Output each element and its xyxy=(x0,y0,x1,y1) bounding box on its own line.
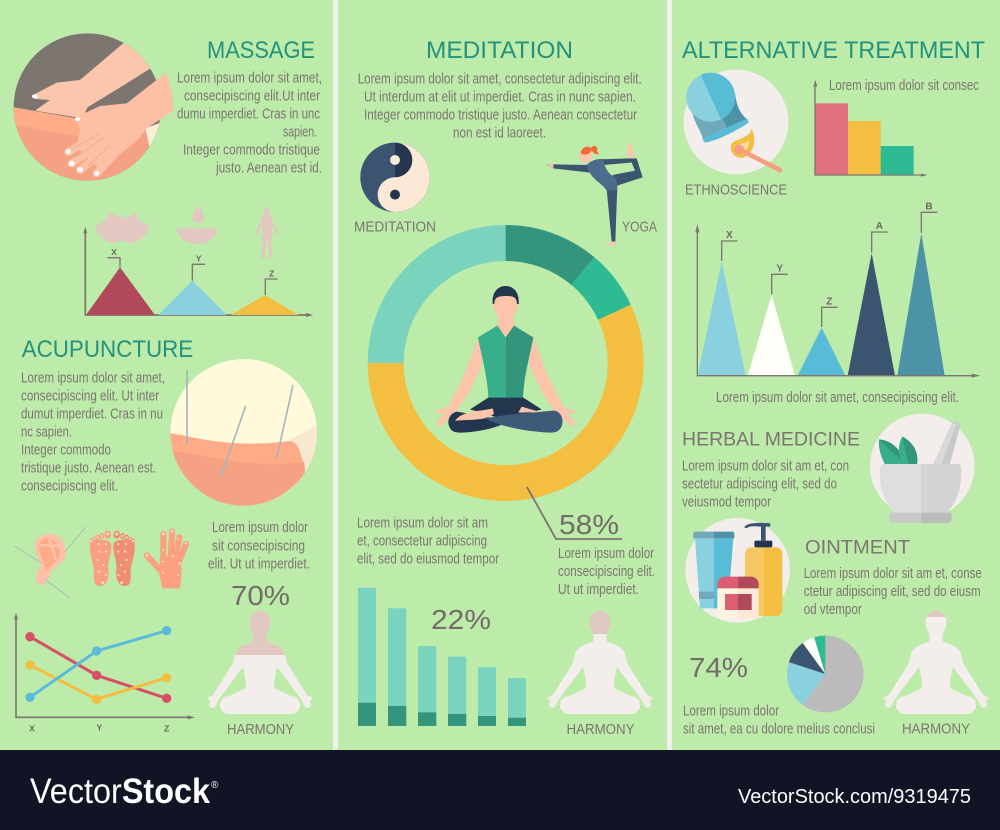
figure: meditating man xyxy=(433,286,578,433)
meditation text block: Integer commodo tristique justo. Aenean consectetur xyxy=(364,107,637,123)
url: vectorstock id: VectorStock.com/9319475 xyxy=(738,786,971,808)
label: meditation: MEDITATION xyxy=(354,219,436,236)
chart: tall triangles: Z xyxy=(826,296,832,307)
ointment text block: od vtempor xyxy=(804,602,862,618)
icon: left foot xyxy=(90,531,111,586)
label: harmony: HARMONY xyxy=(227,721,294,738)
stat: 74%: 74% xyxy=(689,652,748,683)
label: ethnoscience: ETHNOSCIENCE xyxy=(685,182,787,199)
herbal text block: Lorem ipsum dolor sit am et, con xyxy=(682,459,849,475)
icon: ointment products xyxy=(685,518,790,623)
chart: line chart: Z xyxy=(164,723,170,733)
chart: bars xyxy=(358,588,526,726)
massage text block xyxy=(177,71,322,177)
chart: line chart xyxy=(14,613,195,733)
herbal text block: sectetur adipiscing elit, sed do xyxy=(682,477,837,493)
acupuncture text block: consecipiscing elit. Ut inter xyxy=(21,389,159,405)
panel: meditation xyxy=(354,37,657,738)
stat: 22%: 22% xyxy=(431,604,491,635)
icons: ear, feet and hand xyxy=(14,527,187,598)
text: under donut left: elit, sed do eiusmod tempor xyxy=(357,552,499,568)
chart: tall triangles: A xyxy=(876,221,883,232)
massage illustration xyxy=(14,33,174,181)
icon: human body xyxy=(254,207,279,259)
chart: tall triangles: Y xyxy=(776,263,783,274)
acupuncture text block: tristique justo. Aenean est. xyxy=(21,461,156,477)
text: pie caption xyxy=(683,704,875,738)
meditation text block: Ut interdum at elit ut imperdiet. Cras in nunc sapien. xyxy=(364,89,636,105)
text: under donut left: Lorem ipsum dolor sit am xyxy=(357,516,488,532)
text: under donut left: et, consectetur adipiscing xyxy=(357,534,487,550)
text: lorem ipsum 70: Lorem ipsum dolor xyxy=(212,520,308,536)
figure: harmony 22 xyxy=(547,611,653,714)
massage text block: consecipiscing elit.Ut inter xyxy=(184,89,320,105)
chart: massage triangles xyxy=(83,205,313,317)
massage text block: sapien. xyxy=(283,125,317,141)
text: lorem ipsum 70: elit. Ut ut imperdiet. xyxy=(208,557,310,573)
acupuncture text block: consecipiscing elit. xyxy=(21,479,118,495)
title: acupuncture: ACUPUNCTURE xyxy=(22,336,193,363)
title: meditation: MEDITATION xyxy=(426,37,573,64)
text: under donut right: Lorem ipsum dolor xyxy=(558,546,654,562)
meditation text block: non est id laoreet. xyxy=(453,125,546,141)
chart: tall triangles xyxy=(695,201,980,378)
stat: 70%: 70% xyxy=(231,580,290,611)
label: yoga: YOGA xyxy=(622,219,657,236)
chart: massage triangles: X xyxy=(111,247,117,257)
panel: massage and acupuncture xyxy=(10,30,323,738)
logo registered mark: ® xyxy=(211,780,219,791)
chart: tall triangles: X xyxy=(726,230,733,241)
meditation text block: Lorem ipsum dolor sit amet, consectetur adipiscing elit. xyxy=(358,71,642,87)
chart: massage triangles: Y xyxy=(196,254,202,264)
acupuncture text block: Integer commodo xyxy=(21,443,111,459)
title: alternative treatment: ALTERNATIVE TREATMENT xyxy=(682,37,985,64)
acupuncture text block: dumut imperdiet. Cras in nu xyxy=(21,407,163,423)
chart: line chart: X xyxy=(29,723,35,733)
massage text block: Integer commodo tristique xyxy=(183,143,320,159)
chart: pie xyxy=(787,636,864,712)
acupuncture text block xyxy=(21,371,165,495)
text: under donut right: consecipiscing elit. xyxy=(558,564,655,580)
icon: yin yang xyxy=(360,143,430,212)
icon: lotus xyxy=(95,212,150,243)
panel: alternative treatment xyxy=(682,37,989,738)
chart: donut xyxy=(368,225,644,501)
stat: 58%: 58% xyxy=(559,509,619,540)
label: harmony: HARMONY xyxy=(902,721,970,738)
massage text block: justo. Aenean est id. xyxy=(215,161,322,177)
acupuncture text block: nc sapien. xyxy=(21,425,72,441)
chart: line chart: Y xyxy=(96,723,102,733)
icon: right foot xyxy=(113,531,135,586)
text: lorem ipsum 70: sit consecipiscing xyxy=(212,539,305,555)
text: lorem ipsum 70 xyxy=(208,520,310,573)
icon: hand xyxy=(145,530,187,588)
acupuncture illustration xyxy=(170,359,317,506)
icon: ear xyxy=(14,527,86,598)
text: pie caption: sit amet, ea cu dolore melius conclusi xyxy=(683,722,875,738)
heading: ointment: OINTMENT xyxy=(805,536,910,558)
title: massage: MASSAGE xyxy=(207,37,315,64)
heading: herbal medicine: HERBAL MEDICINE xyxy=(682,429,860,451)
text: under donut right xyxy=(558,546,655,598)
footer bar xyxy=(0,750,1000,830)
icon: cupping glass and match xyxy=(684,70,788,174)
callout: 58% leader xyxy=(527,487,622,539)
chart: stepped bars xyxy=(813,80,927,177)
ointment text block xyxy=(804,566,982,618)
massage text block: dumu imperdiet. Cras in unc xyxy=(177,107,320,123)
icon: mortar and pestle xyxy=(870,414,975,523)
herbal text block: veiusmod tempor xyxy=(682,495,771,511)
text: under donut right: Ut ut imperdiet. xyxy=(558,582,639,598)
chart: tall triangles: B xyxy=(925,201,933,212)
chart: massage triangles: Z xyxy=(269,269,275,279)
herbal text block xyxy=(682,459,849,511)
massage text block: Lorem ipsum dolor sit amet, xyxy=(177,71,322,87)
logo: vectorstock: VectorStock xyxy=(30,772,210,811)
text: under donut left xyxy=(357,516,499,568)
acupuncture text block: Lorem ipsum dolor sit amet, xyxy=(21,371,165,387)
text: pie caption: Lorem ipsum dolor xyxy=(683,704,779,720)
icon: yoga figure xyxy=(546,143,643,246)
label: harmony: HARMONY xyxy=(566,721,634,738)
figure: harmony 74 xyxy=(883,611,989,714)
icon: oil lamp xyxy=(177,205,217,244)
figure: harmony 70 xyxy=(207,611,313,714)
meditation text block xyxy=(358,71,642,141)
